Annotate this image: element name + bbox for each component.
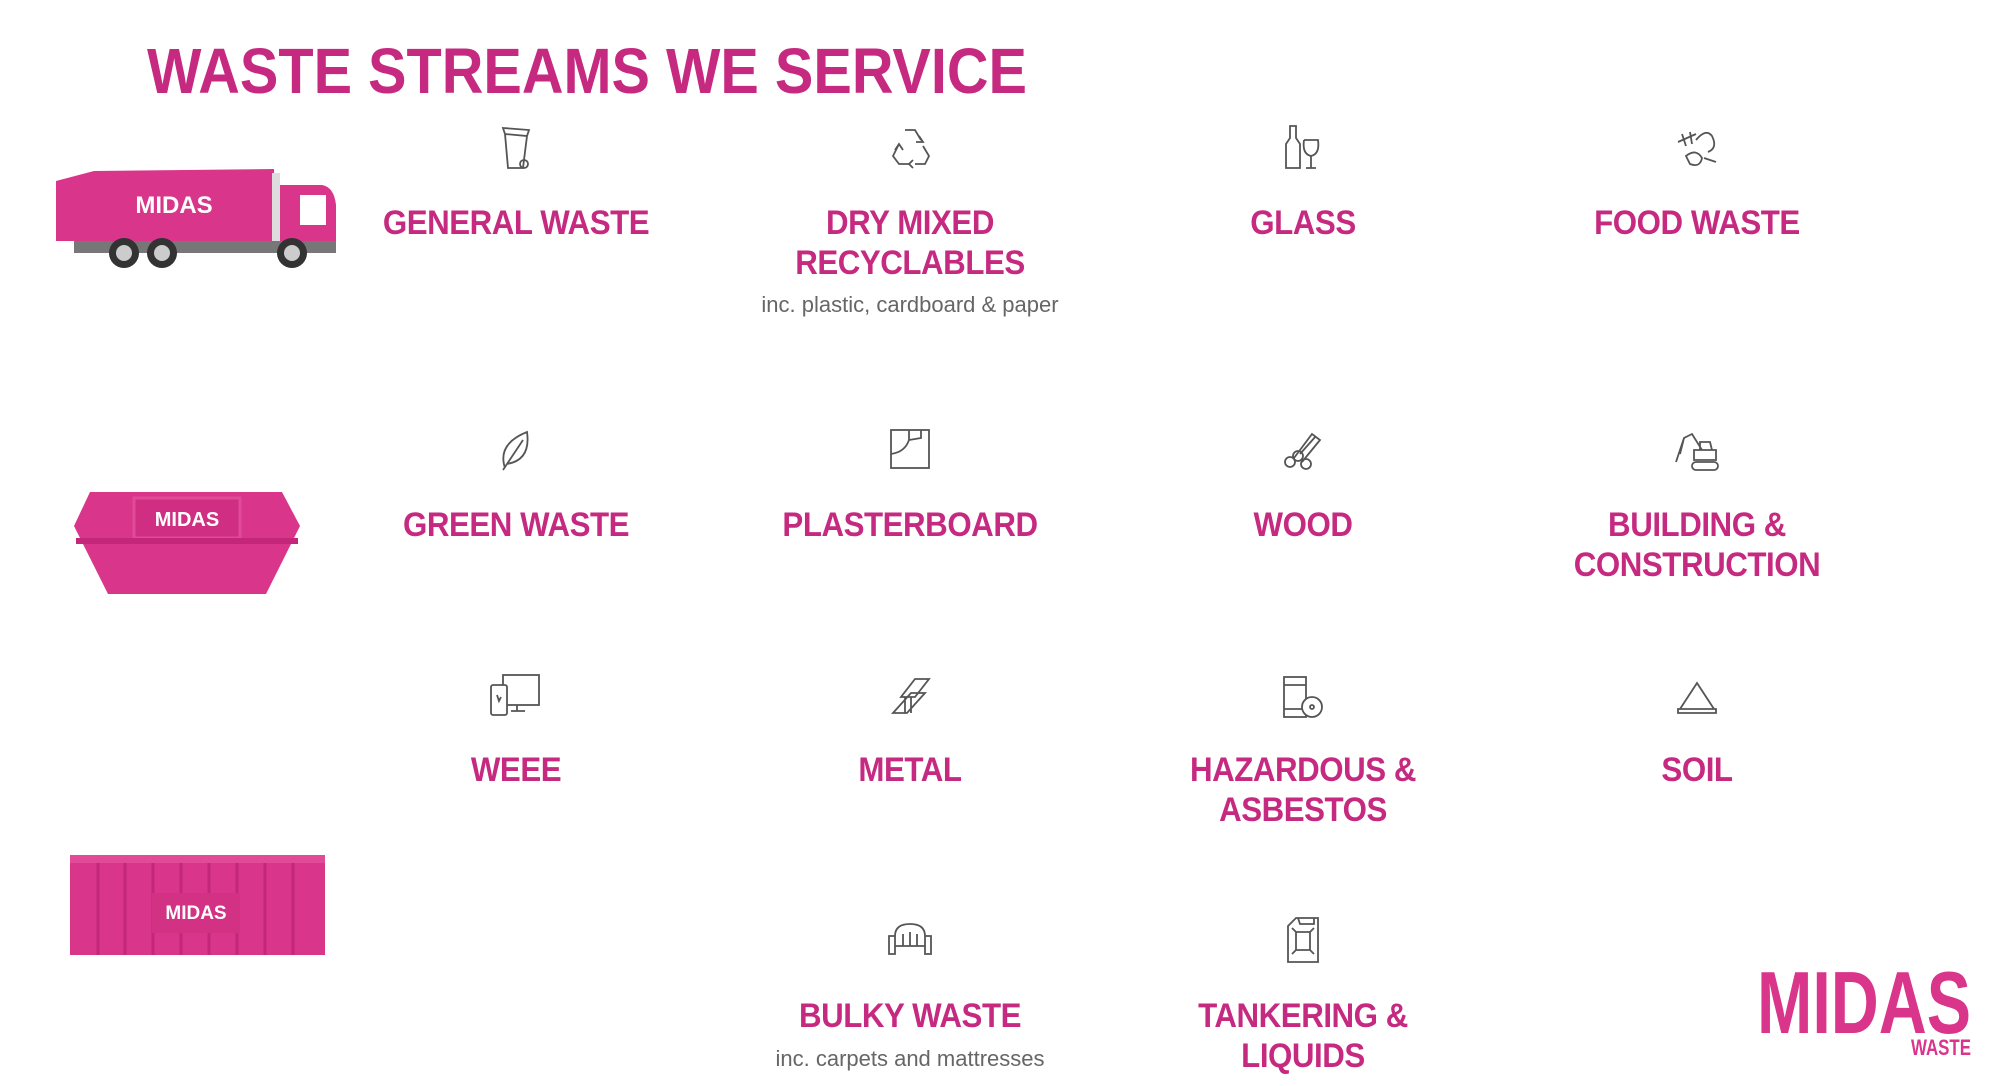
label: green waste: GREEN WASTE [403,506,629,544]
label: tankering & liquids: TANKERING & [1198,997,1408,1035]
label: food waste: FOOD WASTE [1594,204,1800,242]
label: bulky waste: BULKY WASTE [799,997,1021,1035]
label: plasterboard: PLASTERBOARD [782,506,1038,544]
label: dry mixed recyclables: RECYCLABLES [795,244,1025,282]
illustration: roll-on container: MIDAS [165,903,227,924]
icon: plasterboard [890,429,930,469]
label: weee: WEEE [471,751,561,789]
label: building & construction [1574,506,1820,584]
icon: jerry can [1287,917,1319,963]
illustration: roll-on container [70,855,325,955]
illustration: skip: MIDAS [155,509,219,531]
label: tankering & liquids [1198,997,1408,1075]
icon: glass [1285,125,1320,169]
illustration: truck [56,169,336,268]
icon: weee [490,674,540,716]
label: glass: GLASS [1250,204,1356,242]
label: hazardous & asbestos: ASBESTOS [1219,791,1387,829]
icon: food waste [1678,132,1716,166]
label: dry mixed recyclables [795,204,1025,282]
label: metal: METAL [858,751,962,789]
illustration: truck: MIDAS [135,192,213,219]
label: building & construction: BUILDING & [1608,506,1786,544]
subtitle: dry mixed: inc. plastic, cardboard & paper [761,292,1059,317]
icon: soil pile [1677,682,1717,714]
illustration: skip [74,492,300,594]
subtitle: bulky: inc. carpets and mattresses [775,1046,1044,1071]
label: dry mixed recyclables: DRY MIXED [826,204,994,242]
icon: hazardous drum [1283,676,1323,718]
icon: recycle [892,129,930,169]
label: soil: SOIL [1661,751,1733,789]
icon: wood logs [1284,432,1322,470]
icon: metal beam [891,678,931,714]
icon: excavator [1675,432,1719,471]
label: hazardous & asbestos: HAZARDOUS & [1190,751,1416,789]
icon: sofa [888,923,932,955]
icon: bin [502,127,530,169]
label: building & construction: CONSTRUCTION [1574,546,1820,584]
icon: leaf [502,430,528,470]
label: tankering & liquids: LIQUIDS [1241,1037,1365,1075]
label: hazardous & asbestos [1190,751,1416,829]
label: general waste: GENERAL WASTE [383,204,649,242]
label: wood: WOOD [1254,506,1352,544]
